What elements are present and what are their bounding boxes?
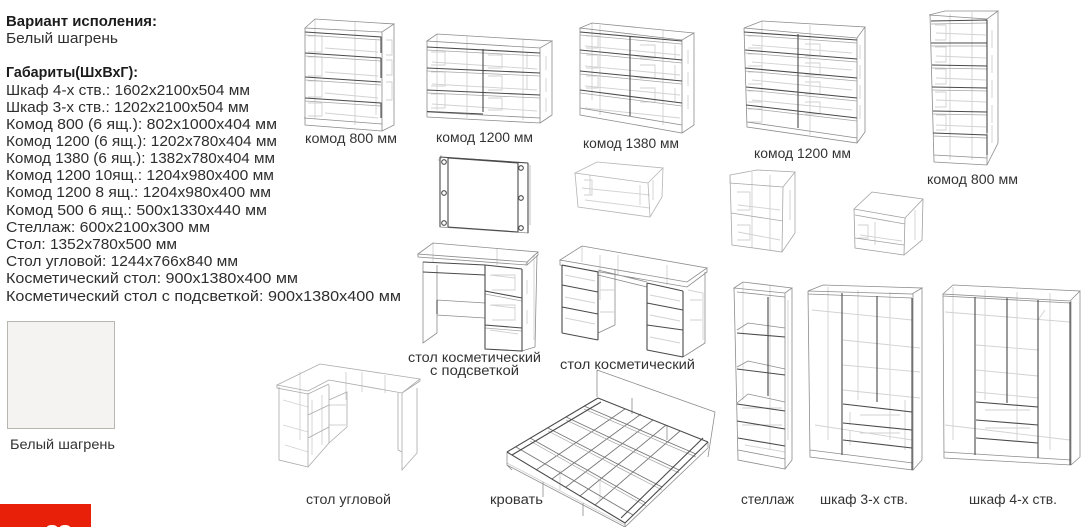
label: three-door wardrobe: шкаф 3-х ств. [820,492,908,507]
icon: bedside table [854,192,923,255]
text block: dimensions list: Комод 800 (6 ящ.): 802х1000х404 мм [6,116,277,133]
label: four-door wardrobe: шкаф 4-х ств. [969,492,1057,507]
swatch label: Белый шагрень [10,437,115,452]
icon: chest 800 with four drawers [304,19,394,131]
label: vanity table with lighting: стол косметический [408,350,541,365]
text block: dimensions list: Шкаф 3-х ств.: 1202х2100х504 мм [6,99,249,116]
icon: chest 1200 with ten drawers [744,21,865,143]
heading: dimensions: Габариты(ШхВхГ): [6,64,138,81]
text block: dimensions list: Косметический стол: 900х1380х400 мм [6,270,298,287]
icon: vanity table [560,246,707,357]
icon: tall chest 800 [929,11,998,165]
icon: chest 500 two drawers [730,170,795,252]
icon: bed frame [507,370,715,527]
text block: dimensions list: Стол: 1352х780х500 мм [6,236,177,253]
label: corner desk: стол угловой [306,492,391,507]
text block: dimensions list: Комод 1200 8 ящ.: 1204х980х400 мм [6,184,271,201]
text block: dimensions list: Комод 1200 (6 ящ.): 1202х780х404 мм [6,133,277,150]
label: vanity table with lighting [408,350,541,378]
text block: dimensions list [6,82,401,305]
icon: open shelving unit [734,282,792,469]
red badge [0,504,91,527]
label: chest 1200 ten drawers: комод 1200 мм [754,146,851,161]
swatch: white shagreen [8,322,114,428]
text block: dimensions list: Комод 1380 (6 ящ.): 1382х780х404 мм [6,150,275,167]
text block: dimensions list: Косметический стол с подсветкой: 900х1380х400 мм [6,288,401,305]
icon: corner desk [277,364,420,470]
text block: dimensions list: Стол угловой: 1244х766х840 мм [6,253,238,270]
text: finish name: Белый шагрень [6,30,118,47]
icon: chest 1380 with eight drawers [580,23,694,133]
icon: vanity table with lighting [418,243,538,351]
heading: finish variant: Вариант исполения: [6,13,157,30]
label: chest 1380: комод 1380 мм [583,136,679,151]
label: shelving: стеллаж [741,492,794,507]
text block: dimensions list: Комод 1200 10ящ.: 1204х980х400 мм [6,167,274,184]
label: vanity table: стол косметический [560,357,695,372]
icon: three-door wardrobe [808,285,922,470]
icon: four-door wardrobe [943,285,1080,465]
label: tall chest 800: комод 800 мм [927,172,1018,187]
label: chest 1200: комод 1200 мм [436,130,533,145]
icon: chest 1200 with six drawers [427,34,552,123]
label: chest 800: комод 800 мм [305,131,397,146]
label: vanity table with lighting: с подсветкой [430,363,519,378]
icon: wide drawer [575,162,663,217]
text block: dimensions list: Комод 500 6 ящ.: 500х1330х440 мм [6,202,267,219]
text block: dimensions list: Стеллаж: 600х2100х300 мм [6,219,210,236]
label: bed: кровать [490,492,543,507]
icon: vanity mirror [438,155,530,233]
text block: dimensions list: Шкаф 4-х ств.: 1602х2100х504 мм [6,82,250,99]
